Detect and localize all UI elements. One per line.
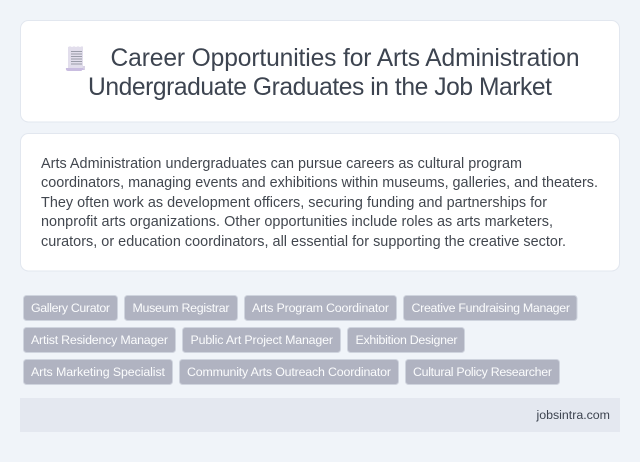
tag: Public Art Project Manager bbox=[182, 328, 340, 352]
description text: They often work as development officers, securing funding and partnerships for bbox=[41, 195, 547, 211]
tag: Public Art Project Manager: Public Art Project Manager bbox=[190, 333, 333, 347]
tag: Gallery Curator: Gallery Curator bbox=[31, 301, 110, 315]
tag: Museum Registrar: Museum Registrar bbox=[132, 301, 230, 315]
panel: description bbox=[20, 134, 620, 271]
tag: Arts Marketing Specialist bbox=[24, 360, 172, 384]
tag: Community Arts Outreach Coordinator bbox=[180, 360, 398, 384]
title: Undergraduate Graduates in the Job Market bbox=[88, 74, 552, 101]
tag: Gallery Curator bbox=[24, 296, 118, 320]
tag: Exhibition Designer: Exhibition Designer bbox=[356, 333, 458, 347]
title: Career Opportunities for Arts Administration bbox=[110, 45, 580, 72]
tag: Creative Fundraising Manager: Creative Fundraising Manager bbox=[412, 301, 570, 315]
tag: Cultural Policy Researcher bbox=[406, 360, 560, 384]
description text: curators, or education coordinators, all essential for supporting the creative sector. bbox=[41, 234, 566, 250]
tag: Cultural Policy Researcher: Cultural Policy Researcher bbox=[413, 365, 552, 379]
tag: Museum Registrar bbox=[124, 296, 238, 320]
title bbox=[88, 45, 580, 101]
tag: Arts Program Coordinator: Arts Program Coordinator bbox=[252, 301, 389, 315]
tag: Artist Residency Manager bbox=[24, 328, 176, 352]
footer bbox=[20, 398, 620, 432]
tag: Community Arts Outreach Coordinator: Community Arts Outreach Coordinator bbox=[187, 365, 391, 379]
description text: nonprofit arts organizations. Other opportunities include roles as arts marketers, bbox=[41, 214, 553, 230]
footer source text: jobsintra.com bbox=[536, 408, 610, 422]
panel: career tags bbox=[24, 296, 577, 384]
panel: header bbox=[20, 20, 620, 122]
tag: Arts Marketing Specialist: Arts Marketing Specialist bbox=[31, 365, 166, 379]
description text bbox=[41, 156, 598, 250]
description text: Arts Administration undergraduates can pursue careers as cultural program bbox=[41, 156, 522, 172]
icon: paper scroll bbox=[66, 46, 85, 71]
tag: Exhibition Designer bbox=[348, 328, 464, 352]
tag: Artist Residency Manager: Artist Residency Manager bbox=[31, 333, 168, 347]
tag: Arts Program Coordinator bbox=[244, 296, 396, 320]
description text: coordinators, managing events and exhibitions within museums, galleries, and theaters. bbox=[41, 175, 598, 191]
tag: Creative Fundraising Manager bbox=[404, 296, 577, 320]
